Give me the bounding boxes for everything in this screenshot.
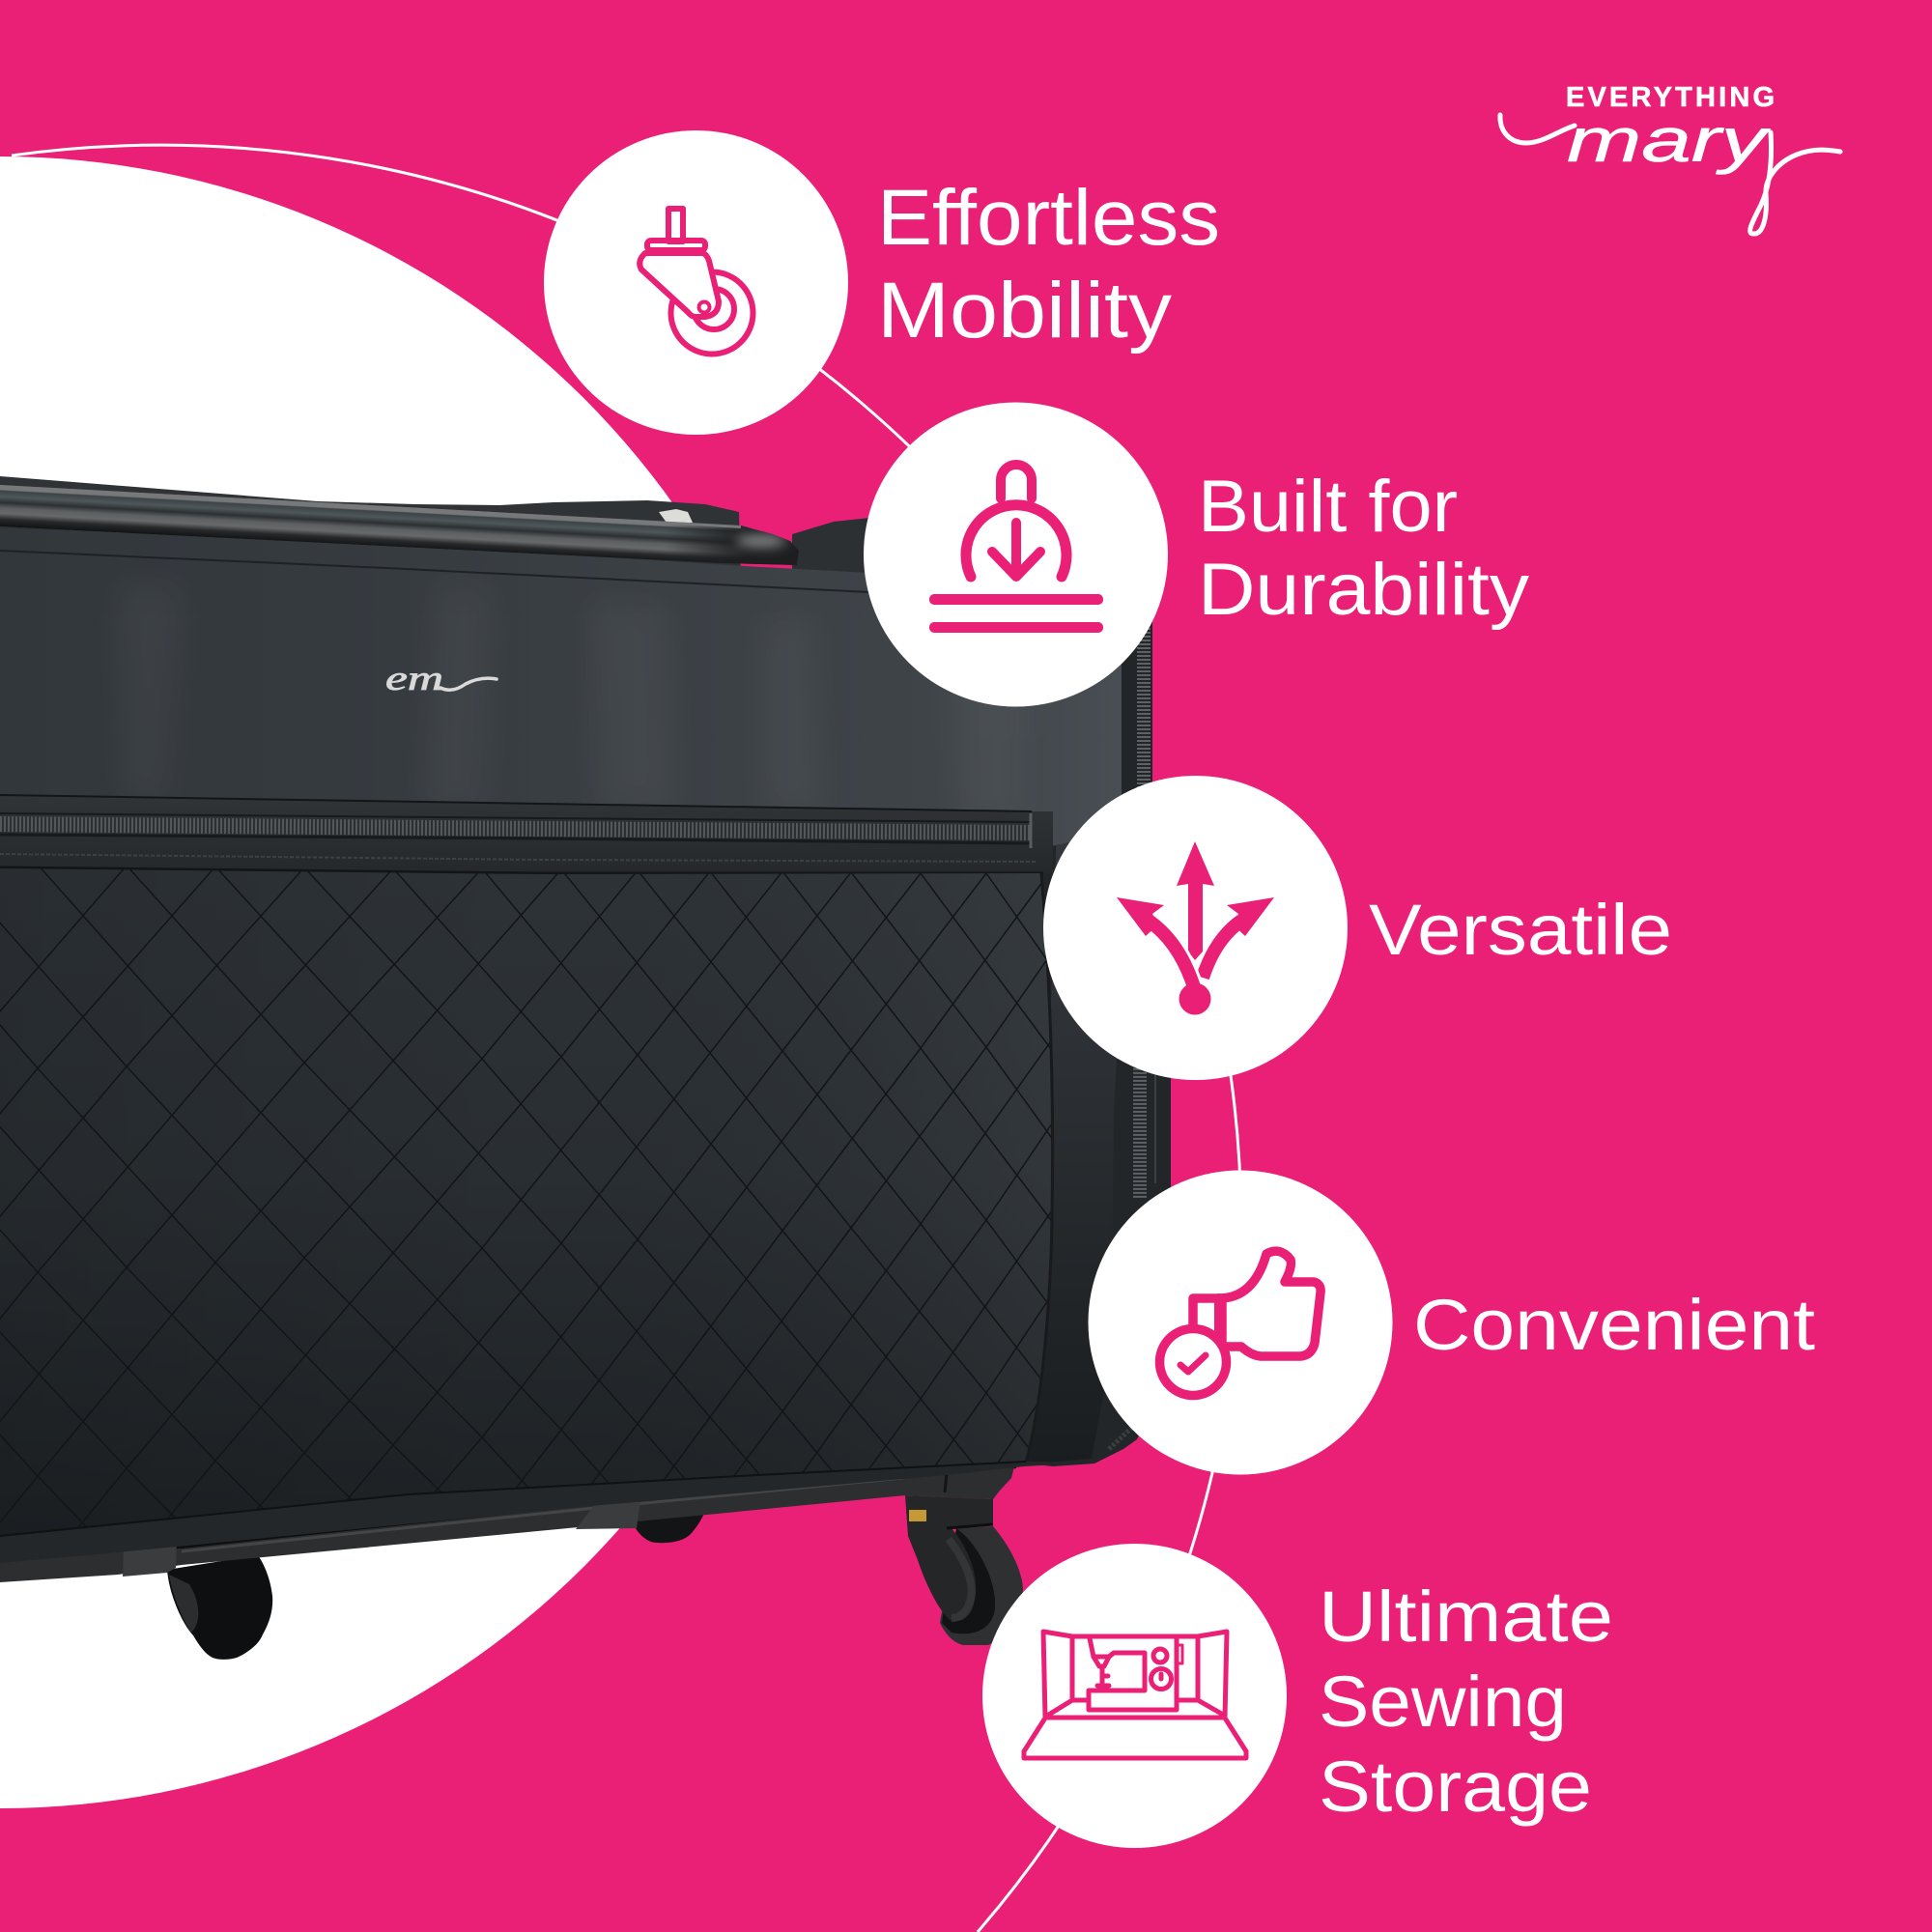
logo wordmark top: EVERYTHING — [1566, 82, 1775, 113]
connecting arc line — [12, 145, 1241, 1932]
heading: Mobility — [877, 267, 1172, 355]
icon: three diverging arrows — [1117, 841, 1274, 1014]
zipper tab — [659, 509, 693, 523]
top carry handle — [0, 485, 802, 570]
icon: caster wheel — [639, 209, 753, 354]
soft fabric folds — [116, 580, 1024, 821]
heading: Built for — [1198, 466, 1458, 548]
upper front panel — [0, 528, 1122, 850]
dark side piece behind handle — [792, 518, 927, 580]
circle badge — [544, 130, 848, 435]
zipper band — [0, 795, 1053, 874]
heading: Effortless — [877, 174, 1220, 262]
circle badge — [864, 402, 1168, 707]
emblem on case: em — [385, 659, 443, 697]
circle badge — [1043, 776, 1348, 1080]
heading: Convenient — [1413, 1285, 1815, 1365]
top quilted lid edge — [0, 476, 741, 580]
icon: sewing machine in open case — [1024, 1632, 1246, 1758]
side gusset and side zipper — [1005, 570, 1171, 1466]
feature: Ultimate Sewing Storage — [982, 1544, 1613, 1848]
lower frame bar — [0, 1461, 1016, 1582]
circle badge — [1088, 1171, 1393, 1474]
heading: Versatile — [1369, 890, 1672, 970]
caster wheels — [167, 1495, 1023, 1660]
bottom seam — [0, 1462, 1026, 1536]
feature: Versatile — [1043, 776, 1672, 1080]
icon: weight on surface — [929, 465, 1103, 633]
feature: Convenient — [1088, 1171, 1815, 1474]
circle badge — [982, 1544, 1287, 1848]
bottom piping — [0, 1462, 1091, 1563]
emblem on case — [385, 659, 497, 697]
heading: Durability — [1198, 549, 1529, 631]
icon: thumbs up with check — [1159, 1251, 1321, 1395]
white background circle — [0, 156, 826, 1808]
panel top seam — [0, 551, 1063, 601]
quilted stitching lines — [0, 869, 1051, 1526]
logo flourishes — [1500, 115, 1840, 234]
heading: Ultimate — [1319, 1577, 1613, 1657]
product photo: rolling sewing case — [0, 476, 1222, 1660]
heading: Sewing — [1319, 1662, 1567, 1742]
logo script word: mary — [1567, 105, 1772, 175]
feature: Effortless Mobility — [544, 130, 1220, 435]
heading: Storage — [1319, 1747, 1592, 1827]
feature: Built for Durability — [864, 402, 1529, 707]
logo: Everything Mary — [1500, 82, 1840, 234]
quilted front pocket — [0, 868, 1053, 1536]
heading — [1319, 1577, 1613, 1827]
pocket right seam — [1026, 873, 1053, 1463]
heading — [877, 174, 1220, 355]
heading — [1198, 466, 1529, 631]
